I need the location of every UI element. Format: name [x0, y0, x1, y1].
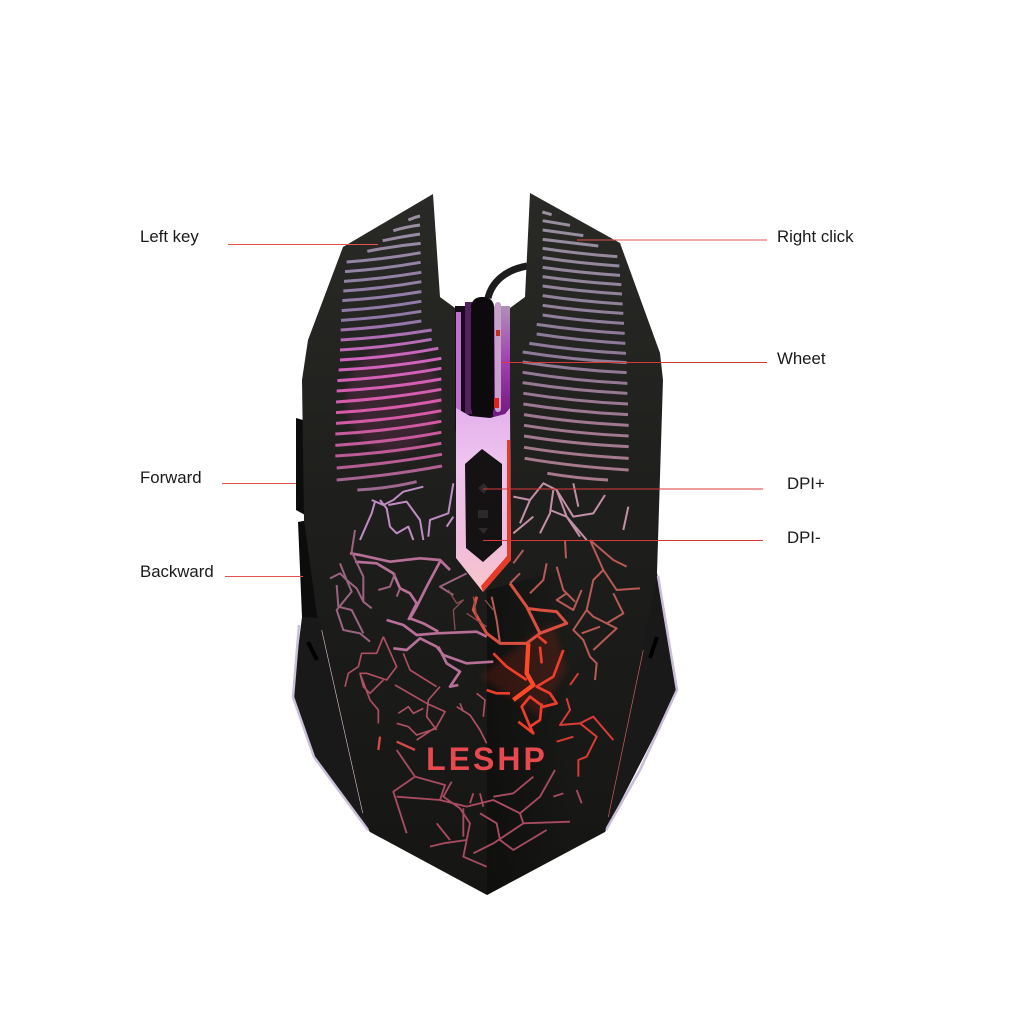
main body shell: [302, 193, 663, 895]
center seam darker half: [487, 560, 657, 895]
callout: Left key: Left key: [140, 227, 199, 246]
crack pattern lower: [330, 530, 640, 867]
callout: Wheet: Wheet: [777, 349, 826, 368]
mouse illustration: [292, 193, 678, 895]
left button slots: [335, 216, 442, 490]
callout: DPI-: DPI-: [787, 528, 821, 547]
wheel channel: [455, 297, 510, 431]
chrome center strip: [456, 408, 511, 592]
right button slots: [523, 212, 629, 480]
callout: DPI+: DPI+: [787, 474, 825, 493]
side skirts: [292, 560, 678, 832]
button slot grilles: [335, 212, 629, 490]
DPI button: [465, 449, 502, 562]
skirt light edges: [293, 576, 677, 830]
callout: Backward: Backward: [140, 562, 214, 581]
crack pattern upper: [360, 483, 628, 540]
callout: Right click: Right click: [777, 227, 854, 246]
forward and backward side buttons: [296, 418, 320, 618]
callout: Forward: Forward: [140, 468, 202, 487]
scroll wheel: [471, 297, 494, 417]
glow behind left grille: [347, 347, 440, 453]
logo: LESHP: LESHP: [426, 741, 548, 777]
mouse cable: [488, 266, 527, 298]
